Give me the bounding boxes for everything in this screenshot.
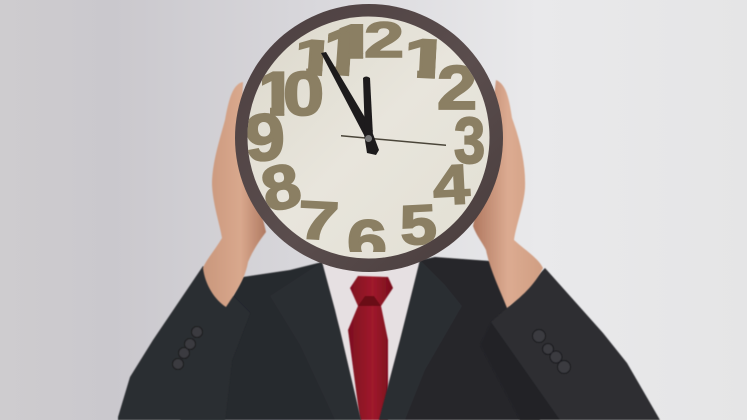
- jacket: body and lapels: [180, 257, 540, 420]
- wall clock: [235, 4, 503, 276]
- clock numerals: 2: [364, 13, 404, 68]
- clock numerals: 3: [454, 104, 485, 177]
- clock numerals: 1: [287, 28, 341, 87]
- clock numerals: 8: [255, 149, 307, 225]
- left sleeve: [118, 266, 250, 420]
- clock numerals: [248, 21, 484, 252]
- clock face: [248, 16, 490, 258]
- right sleeve: [480, 268, 660, 420]
- hour hand: [363, 76, 373, 136]
- necktie: [348, 276, 393, 420]
- clock numerals: 1: [331, 15, 378, 68]
- clock numerals: 1: [254, 60, 298, 129]
- clock frame: [235, 4, 503, 272]
- left sleeve buttons: [172, 326, 202, 370]
- clock numerals: 0: [283, 60, 324, 129]
- clock numerals: 6: [347, 209, 387, 276]
- clock numerals: 9: [243, 99, 287, 175]
- right hand and forearm: [473, 80, 543, 308]
- clock numerals: 4: [431, 153, 471, 217]
- minute hand: [321, 52, 373, 137]
- shirt: [318, 258, 425, 420]
- second hand: [341, 135, 446, 146]
- clock numerals: 1: [396, 27, 455, 91]
- left hand and forearm: [203, 82, 266, 307]
- clock numerals: 7: [296, 189, 341, 252]
- clock numerals: 5: [398, 193, 438, 257]
- centre hub: [364, 134, 379, 155]
- clock numerals: 2: [437, 54, 477, 123]
- right sleeve buttons: [532, 330, 570, 374]
- clock numerals: 1: [316, 16, 368, 91]
